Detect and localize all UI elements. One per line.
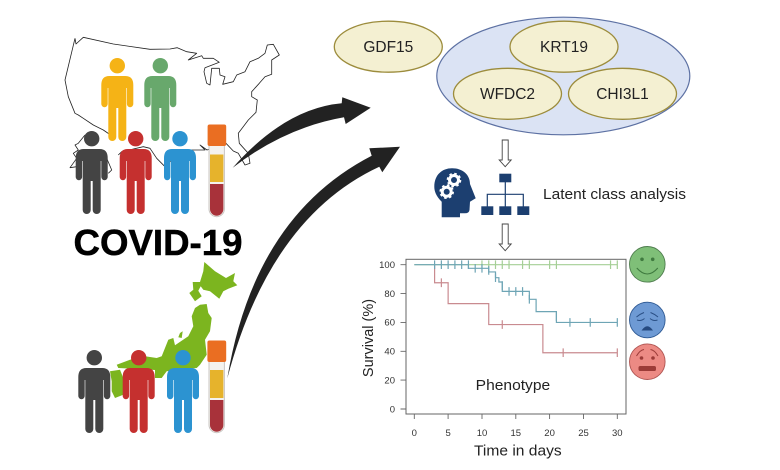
x axis labels: 30 [612, 428, 623, 439]
person: yellow [101, 58, 133, 141]
x axis labels [412, 428, 623, 439]
biomarker: KRT19 [510, 21, 618, 72]
person: dark grey Japan [78, 350, 110, 433]
biomarker: GDF15: GDF15 [363, 39, 413, 56]
panel: biomarker group [437, 17, 690, 135]
map: Japan [110, 262, 237, 398]
biomarker: WFDC2 [454, 68, 562, 119]
y axis labels: 20 [384, 375, 395, 386]
curve: green phenotype [414, 260, 617, 269]
y axis ticks [400, 265, 617, 419]
person: blue Japan [167, 350, 199, 433]
arrow: hollow down 1 [499, 140, 511, 167]
arrow: Japan to biomarkers [227, 147, 400, 378]
y axis labels: 0 [390, 404, 395, 415]
y axis labels: 40 [384, 347, 395, 358]
biomarker: CHI3L1 [568, 68, 676, 119]
person: dark grey [76, 131, 108, 214]
biomarker: GDF15 [334, 21, 442, 72]
curve: red phenotype [435, 265, 617, 357]
biomarker: KRT19: KRT19 [540, 39, 588, 56]
person: red Japan [123, 350, 155, 433]
axis title: Survival: Survival (%) [361, 299, 377, 377]
x axis labels: 15 [511, 428, 521, 439]
icon: sad face [630, 302, 665, 338]
x axis labels: 5 [445, 428, 451, 439]
y axis labels [379, 260, 395, 415]
icon: sick face [630, 344, 665, 380]
title: COVID-19: COVID-19 [74, 222, 243, 263]
label: Latent class analysis: Latent class analysis [543, 186, 686, 203]
y axis labels: 100 [379, 260, 395, 271]
icon: hierarchy [481, 174, 529, 215]
x axis labels: 0 [412, 428, 417, 439]
label: Phenotype: Phenotype [476, 377, 550, 394]
arrow: hollow down 2 [499, 224, 511, 251]
arrow: USA to biomarkers [233, 97, 371, 168]
biomarker: WFDC2: WFDC2 [480, 86, 535, 103]
x axis labels: 20 [544, 428, 555, 439]
person: blue [164, 131, 196, 214]
icon: blood tube USA [208, 124, 226, 217]
x axis labels: 25 [578, 428, 589, 439]
curve: blue phenotype [414, 260, 617, 327]
y axis labels: 80 [384, 289, 395, 300]
person: red [120, 131, 152, 214]
y axis labels: 60 [384, 318, 395, 329]
biomarker: CHI3L1: CHI3L1 [596, 86, 649, 103]
chart: Kaplan-Meier survival [361, 259, 626, 460]
axis title: Time in days: Time in days [474, 443, 562, 460]
icon: head with gears [434, 168, 476, 217]
x axis labels: 10 [477, 428, 487, 439]
icon: happy face [630, 246, 665, 282]
person: green [144, 58, 176, 141]
map: USA outline [65, 37, 279, 173]
icon: blood tube Japan [207, 340, 226, 433]
